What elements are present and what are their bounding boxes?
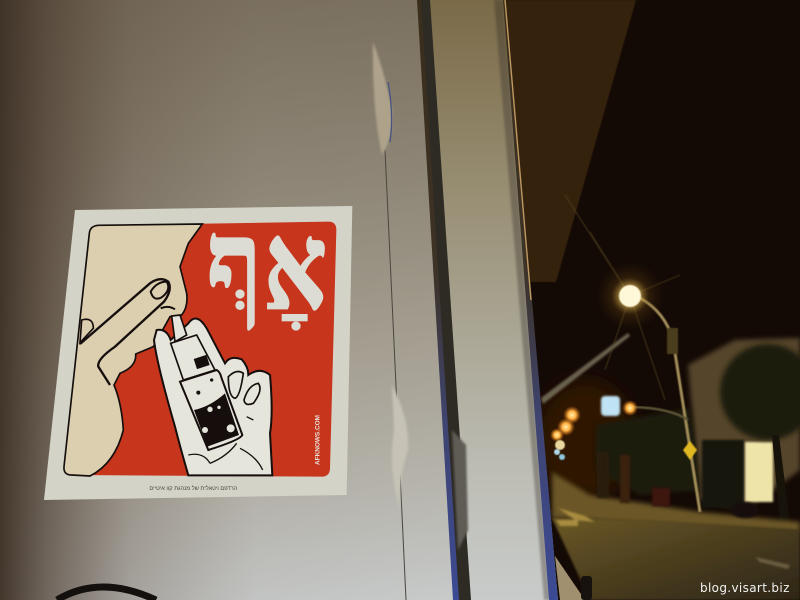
- post right shadow: [494, 0, 550, 600]
- dark arc at bottom: [57, 587, 156, 600]
- yellow sign: [683, 441, 697, 460]
- metal wall panel: [0, 0, 468, 600]
- street lamp pole: [640, 298, 700, 512]
- hand holding bottle: [154, 319, 272, 475]
- sticker: [44, 197, 352, 500]
- tree on right: [720, 344, 800, 440]
- road markings: [556, 508, 790, 569]
- nasal spray bottle: [171, 315, 242, 450]
- post left groove: [420, 0, 471, 600]
- bottle cap: [171, 335, 215, 380]
- trees and dark vegetation: [596, 408, 700, 495]
- roof eave: [505, 0, 636, 282]
- Hebrew title: final pe: ף: [206, 197, 263, 334]
- kerb: [555, 556, 585, 600]
- dent crack: [388, 82, 392, 142]
- shopfronts: [702, 440, 744, 508]
- rivet detail: [452, 430, 468, 550]
- traffic light arm: [632, 407, 688, 420]
- tree trunk: [772, 435, 790, 524]
- nostril line: [161, 307, 175, 309]
- red panel: [64, 222, 336, 477]
- bollard: [581, 576, 592, 600]
- distant lights: [550, 400, 638, 460]
- bottle body: [180, 370, 242, 450]
- dent in metal: [373, 42, 392, 155]
- thumb stub: [80, 319, 93, 343]
- vertical site credit: AFKNOWS.COM: [315, 415, 322, 465]
- metal post: [428, 0, 558, 600]
- caption: הרדפם ויטאלית של מנהגת קוו איטיים: [149, 485, 238, 492]
- finger outline: [80, 279, 170, 385]
- Hebrew title: alef: א: [263, 201, 327, 336]
- building: [688, 338, 800, 510]
- sticker paper: [44, 206, 352, 500]
- watermark: blog.visart.biz: [700, 581, 790, 595]
- street scene: [505, 0, 800, 600]
- panel shading: [0, 0, 468, 600]
- fingernail: [151, 282, 168, 299]
- hand shape: [154, 319, 272, 475]
- groove blue line: [417, 0, 459, 600]
- nozzle: [172, 315, 187, 342]
- street lamp glow: [596, 262, 664, 330]
- post right edge: [503, 0, 558, 600]
- lamp star rays: [565, 195, 680, 400]
- people and parked objects: [597, 452, 759, 518]
- sidewalk: [552, 472, 800, 532]
- street lamp: [619, 285, 641, 307]
- lit shop window: [745, 442, 773, 502]
- cap window: [194, 355, 210, 369]
- low sky glow: [535, 380, 635, 500]
- diagonal beam: [541, 333, 630, 404]
- thin gold edge: [505, 0, 531, 300]
- pointing finger: [80, 279, 175, 385]
- face and fingers in cream: [64, 224, 202, 476]
- night sky: [480, 0, 800, 600]
- panel seam: [385, 150, 406, 600]
- vowel marks: [235, 289, 308, 331]
- palm creases: [188, 417, 263, 470]
- bottle liquid: [194, 393, 239, 447]
- scuff on metal: [392, 385, 408, 510]
- nail lines: [228, 371, 260, 404]
- road: [552, 518, 800, 600]
- blue sign: [601, 396, 620, 416]
- traffic signal: [667, 328, 678, 354]
